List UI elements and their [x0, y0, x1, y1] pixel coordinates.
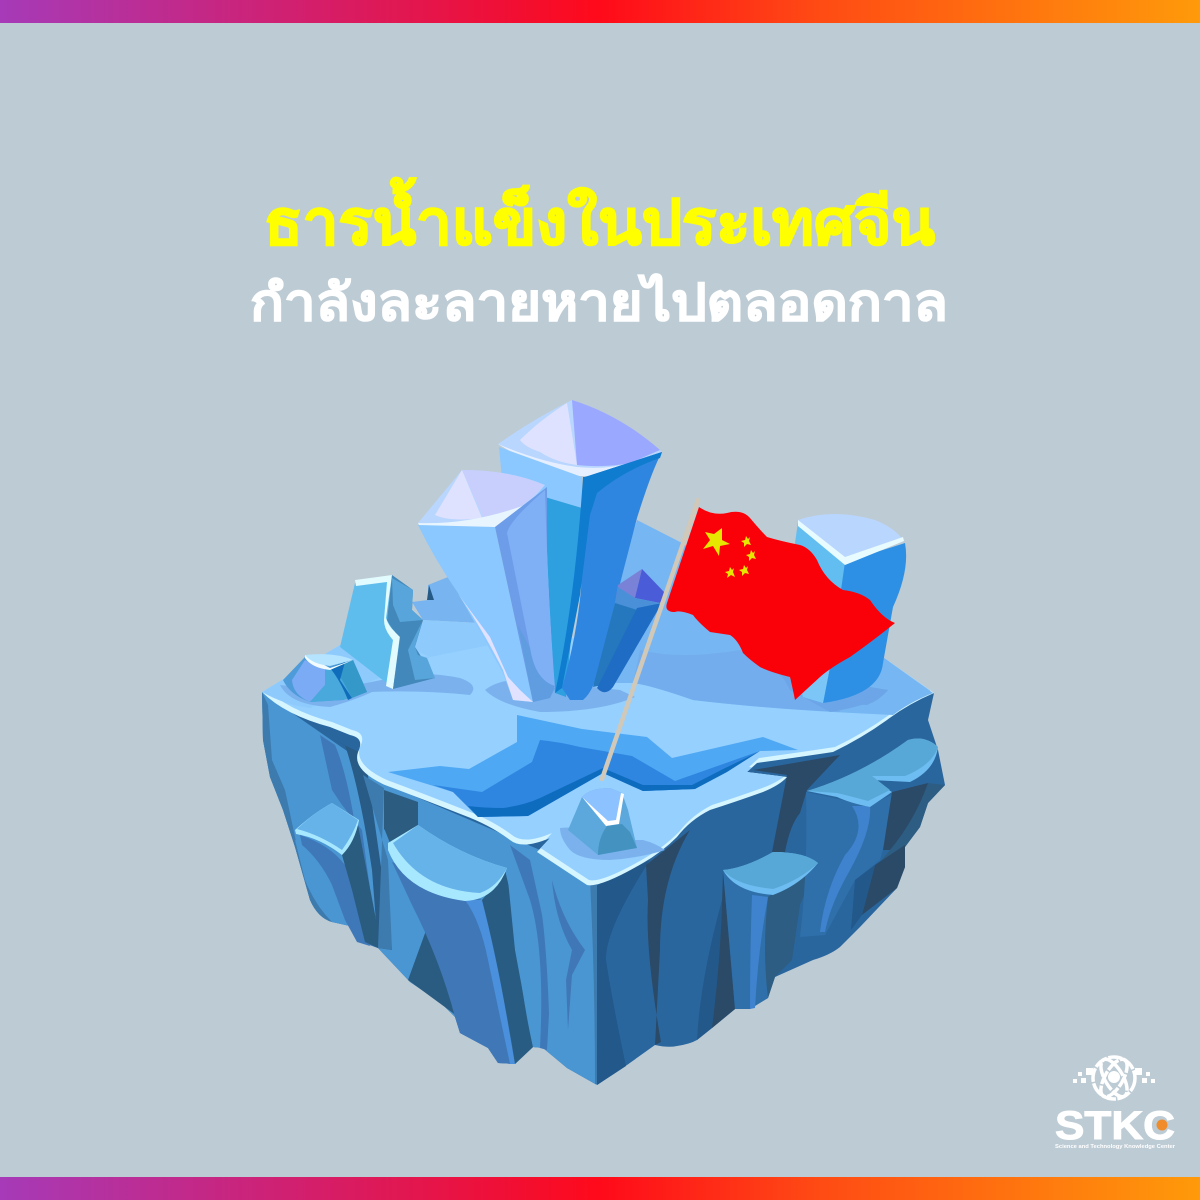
crevasse in the ice	[388, 715, 798, 817]
flag stars	[703, 528, 756, 578]
title: กำลังละลายหายไปตลอดกาล	[250, 273, 948, 331]
ice surface top	[242, 520, 936, 885]
Chinese flag	[666, 507, 895, 700]
small indigo crystal	[593, 569, 665, 692]
main illustration canvas	[251, 176, 1175, 1149]
front crystal	[418, 470, 555, 702]
flag pole	[602, 500, 698, 779]
bottom gradient bar	[0, 1177, 1200, 1200]
logo wordmark: STKC	[1055, 1104, 1175, 1148]
left small rock	[283, 654, 367, 702]
title: ธารน้ำแข็งในประเทศจีน	[264, 177, 935, 258]
logo atom mark	[1073, 1055, 1155, 1101]
cliff base	[262, 692, 945, 1085]
shadows on ice	[280, 672, 888, 712]
left tall rock	[340, 575, 435, 689]
logo orange dot	[1156, 1120, 1168, 1130]
STKC logo	[1055, 1055, 1176, 1150]
front rock	[560, 788, 665, 860]
top gradient bar	[0, 0, 1200, 23]
floating iceberg island	[242, 400, 945, 1085]
logo tagline: Science and Technology Knowledge Center	[1055, 1144, 1176, 1150]
tall crystal	[498, 400, 662, 700]
title	[250, 177, 948, 331]
right crystal	[778, 514, 906, 705]
cliff ledges	[295, 739, 938, 901]
